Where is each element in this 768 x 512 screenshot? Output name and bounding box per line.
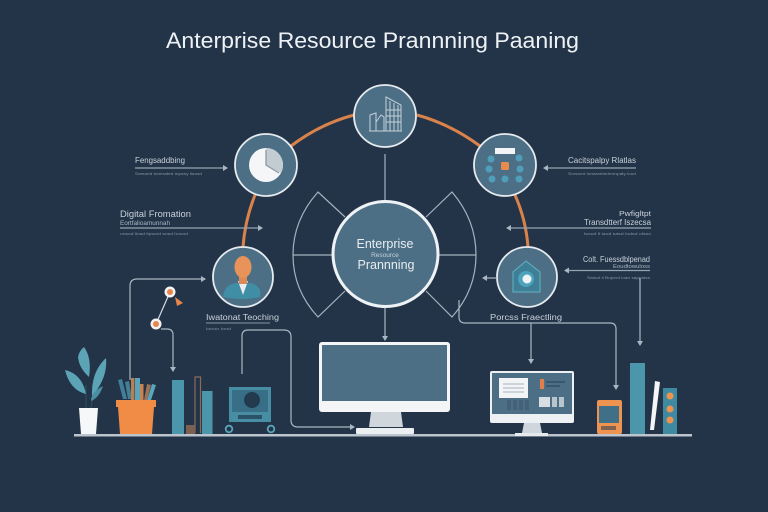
label: right lower: Saloot li Bopent loan sapplass [587, 275, 650, 280]
label: left middle [120, 209, 262, 236]
title: Anterprise Resource Prannning Paaning [166, 28, 579, 53]
central wing frames [293, 154, 476, 317]
label: right middle: lsoud ll laod sasd lodsd olsso [584, 231, 652, 236]
label: right top: Sorsoed lonarantedmrnpaty lood [568, 171, 636, 176]
label: left middle: onsod llosd lipsord snsd hound [120, 231, 188, 236]
plant [65, 347, 106, 434]
label: left middle: Eortfalioamunnah [120, 221, 170, 227]
node: clock [235, 134, 297, 196]
central hub: Prannning [358, 258, 415, 272]
bar chart left [172, 377, 212, 434]
device icon [226, 387, 274, 432]
connector: center to main monitor [384, 308, 386, 340]
label: right lower [565, 255, 651, 280]
label: right middle: Transdtterf Iszecsa [584, 218, 652, 227]
central hub [333, 202, 438, 306]
label: right middle [507, 209, 652, 236]
label: left top: Sarsoed tonerated mpany llaosd [135, 171, 202, 176]
label: instant teaching [206, 313, 279, 331]
main monitor [319, 342, 450, 434]
tablet [597, 400, 622, 434]
label: right top: Cacitspalpy Rlatlas [568, 156, 636, 165]
label: right middle: Pwfigltpt [619, 209, 652, 218]
node: building [354, 85, 416, 147]
node: person [213, 247, 273, 307]
shelf [74, 434, 692, 436]
node: process house [497, 247, 557, 307]
central hub: Enterprise [357, 237, 414, 251]
label: process: Porcss Fraectling [490, 313, 562, 322]
label: right top [544, 156, 636, 176]
right monitor [490, 371, 574, 436]
label: instant teaching: lonon lood [206, 326, 231, 331]
node: workflow [474, 134, 536, 196]
label: instant teaching: Iwatonat Teoching [206, 313, 279, 322]
orange connecting arc [243, 115, 528, 247]
flow connector lines [130, 278, 640, 427]
network nodes [150, 286, 183, 330]
pot of pencils [116, 378, 156, 434]
label: right lower: Eoudtowuloss [613, 264, 651, 270]
label: left top: Fengsaddbing [135, 156, 185, 165]
right bars and pen [630, 363, 677, 434]
central hub: Resource [371, 252, 399, 259]
label: left middle: Digital Fromation [120, 209, 191, 219]
label: left top [135, 156, 227, 176]
label: right lower: Colt. Fuessdblpenad [583, 255, 650, 264]
